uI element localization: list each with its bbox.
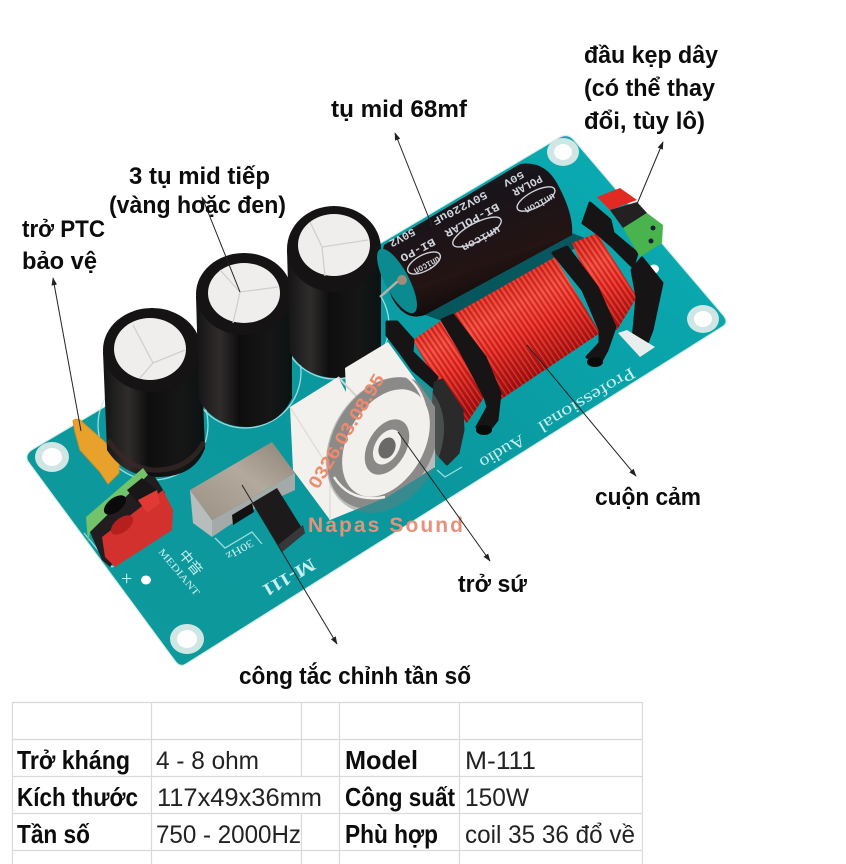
table row: size / power: Công suất	[345, 782, 455, 812]
table row: frequency / suitable: Phù hợp	[345, 819, 438, 849]
watermark phone number: 0326.03.08.95	[304, 370, 388, 492]
large horizontal capacitor: unicon	[459, 222, 502, 253]
table row: frequency / suitable	[17, 819, 635, 849]
label: PTC resistor: trở PTC	[22, 216, 105, 243]
large horizontal capacitor: 50V2	[386, 224, 417, 248]
arrow: mid capacitor 68mf	[395, 133, 432, 226]
label: inductor: cuộn cảm	[595, 484, 701, 511]
PTC resistor	[73, 419, 119, 484]
right terminal connector	[597, 188, 663, 257]
silkscreen text: MEDIANT	[156, 547, 201, 598]
label: ceramic resistor: trở sứ	[458, 571, 528, 598]
table row: impedance / model: Model	[345, 745, 418, 775]
table row: size / power: Kích thước	[17, 782, 138, 812]
ceramic resistors	[290, 342, 435, 520]
table row: impedance / model: 4 - 8 ohm	[156, 747, 259, 775]
label: terminal clamp: đầu kẹp dây	[584, 42, 719, 69]
table row: impedance / model	[17, 745, 536, 775]
label: 3 mid capacitors: 3 tụ mid tiếp	[129, 163, 270, 190]
label: 3 mid capacitors: (vàng hoặc đen)	[109, 192, 286, 219]
capacitor 1	[103, 308, 205, 477]
silkscreen text: +	[121, 568, 132, 590]
board body	[27, 136, 726, 665]
table row: impedance / model: M-111	[465, 747, 536, 775]
label: mid capacitor 68mf: tụ mid 68mf	[331, 96, 468, 123]
table row: impedance / model: Trở kháng	[17, 745, 130, 775]
large horizontal capacitor: 50V220uF	[430, 187, 489, 226]
table grid	[12, 702, 642, 864]
capacitor 2	[196, 253, 292, 427]
large horizontal capacitor	[370, 163, 590, 322]
inductor coil	[387, 203, 662, 464]
silkscreen text: Professional	[534, 364, 639, 437]
capacitor 3	[287, 206, 381, 378]
arrow: frequency switch	[242, 485, 337, 644]
arrow: inductor	[527, 345, 636, 476]
slide switch	[190, 442, 305, 552]
silkscreen text: 30Hz	[223, 536, 256, 562]
arrow: terminal clamp	[637, 142, 663, 204]
table row: frequency / suitable: Tần số	[17, 819, 90, 849]
label: PTC resistor	[22, 216, 105, 275]
arrow: ceramic resistor	[398, 432, 490, 561]
table row: size / power	[17, 782, 529, 812]
label: terminal clamp	[584, 42, 719, 135]
large horizontal capacitor: BI-POLAR	[442, 199, 501, 238]
large horizontal capacitor: BI-PO	[397, 234, 437, 263]
watermark logo	[326, 377, 444, 513]
arrow: PTC	[53, 278, 81, 431]
PCB board photo	[27, 136, 726, 665]
table row: frequency / suitable: coil 35 36 đổ về	[465, 821, 635, 849]
spec table	[12, 702, 642, 864]
label: terminal clamp: đổi, tùy lô)	[584, 108, 705, 135]
label: terminal clamp: (có thể thay	[584, 75, 716, 102]
large horizontal capacitor: POLAR	[510, 171, 544, 197]
left terminal connector	[86, 468, 173, 567]
arrow: 3 mid capacitors	[202, 197, 240, 292]
label: frequency switch: công tắc chỉnh tần số	[239, 662, 471, 690]
silkscreen text	[121, 364, 639, 601]
silkscreen text: 中音	[176, 547, 206, 578]
large horizontal capacitor: unicon	[522, 189, 557, 216]
mounting holes	[35, 138, 719, 654]
watermark brand: Napas Sound	[308, 514, 463, 537]
copper windings	[413, 233, 637, 423]
silkscreen text: Audio	[476, 431, 529, 473]
large horizontal capacitor: unicon	[411, 252, 442, 276]
silkscreen text: M-111	[259, 555, 319, 601]
table row: frequency / suitable: 750 - 2000Hz	[156, 821, 301, 849]
label: 3 mid capacitors	[109, 163, 286, 219]
coil bobbin flanges	[387, 203, 662, 464]
table row: size / power: 150W	[465, 784, 529, 812]
board silkscreen outlines	[84, 271, 462, 567]
large horizontal capacitor: 50V	[501, 167, 525, 188]
table row: size / power: 117x49x36mm	[157, 784, 322, 812]
label: PTC resistor: bảo vệ	[22, 248, 97, 275]
